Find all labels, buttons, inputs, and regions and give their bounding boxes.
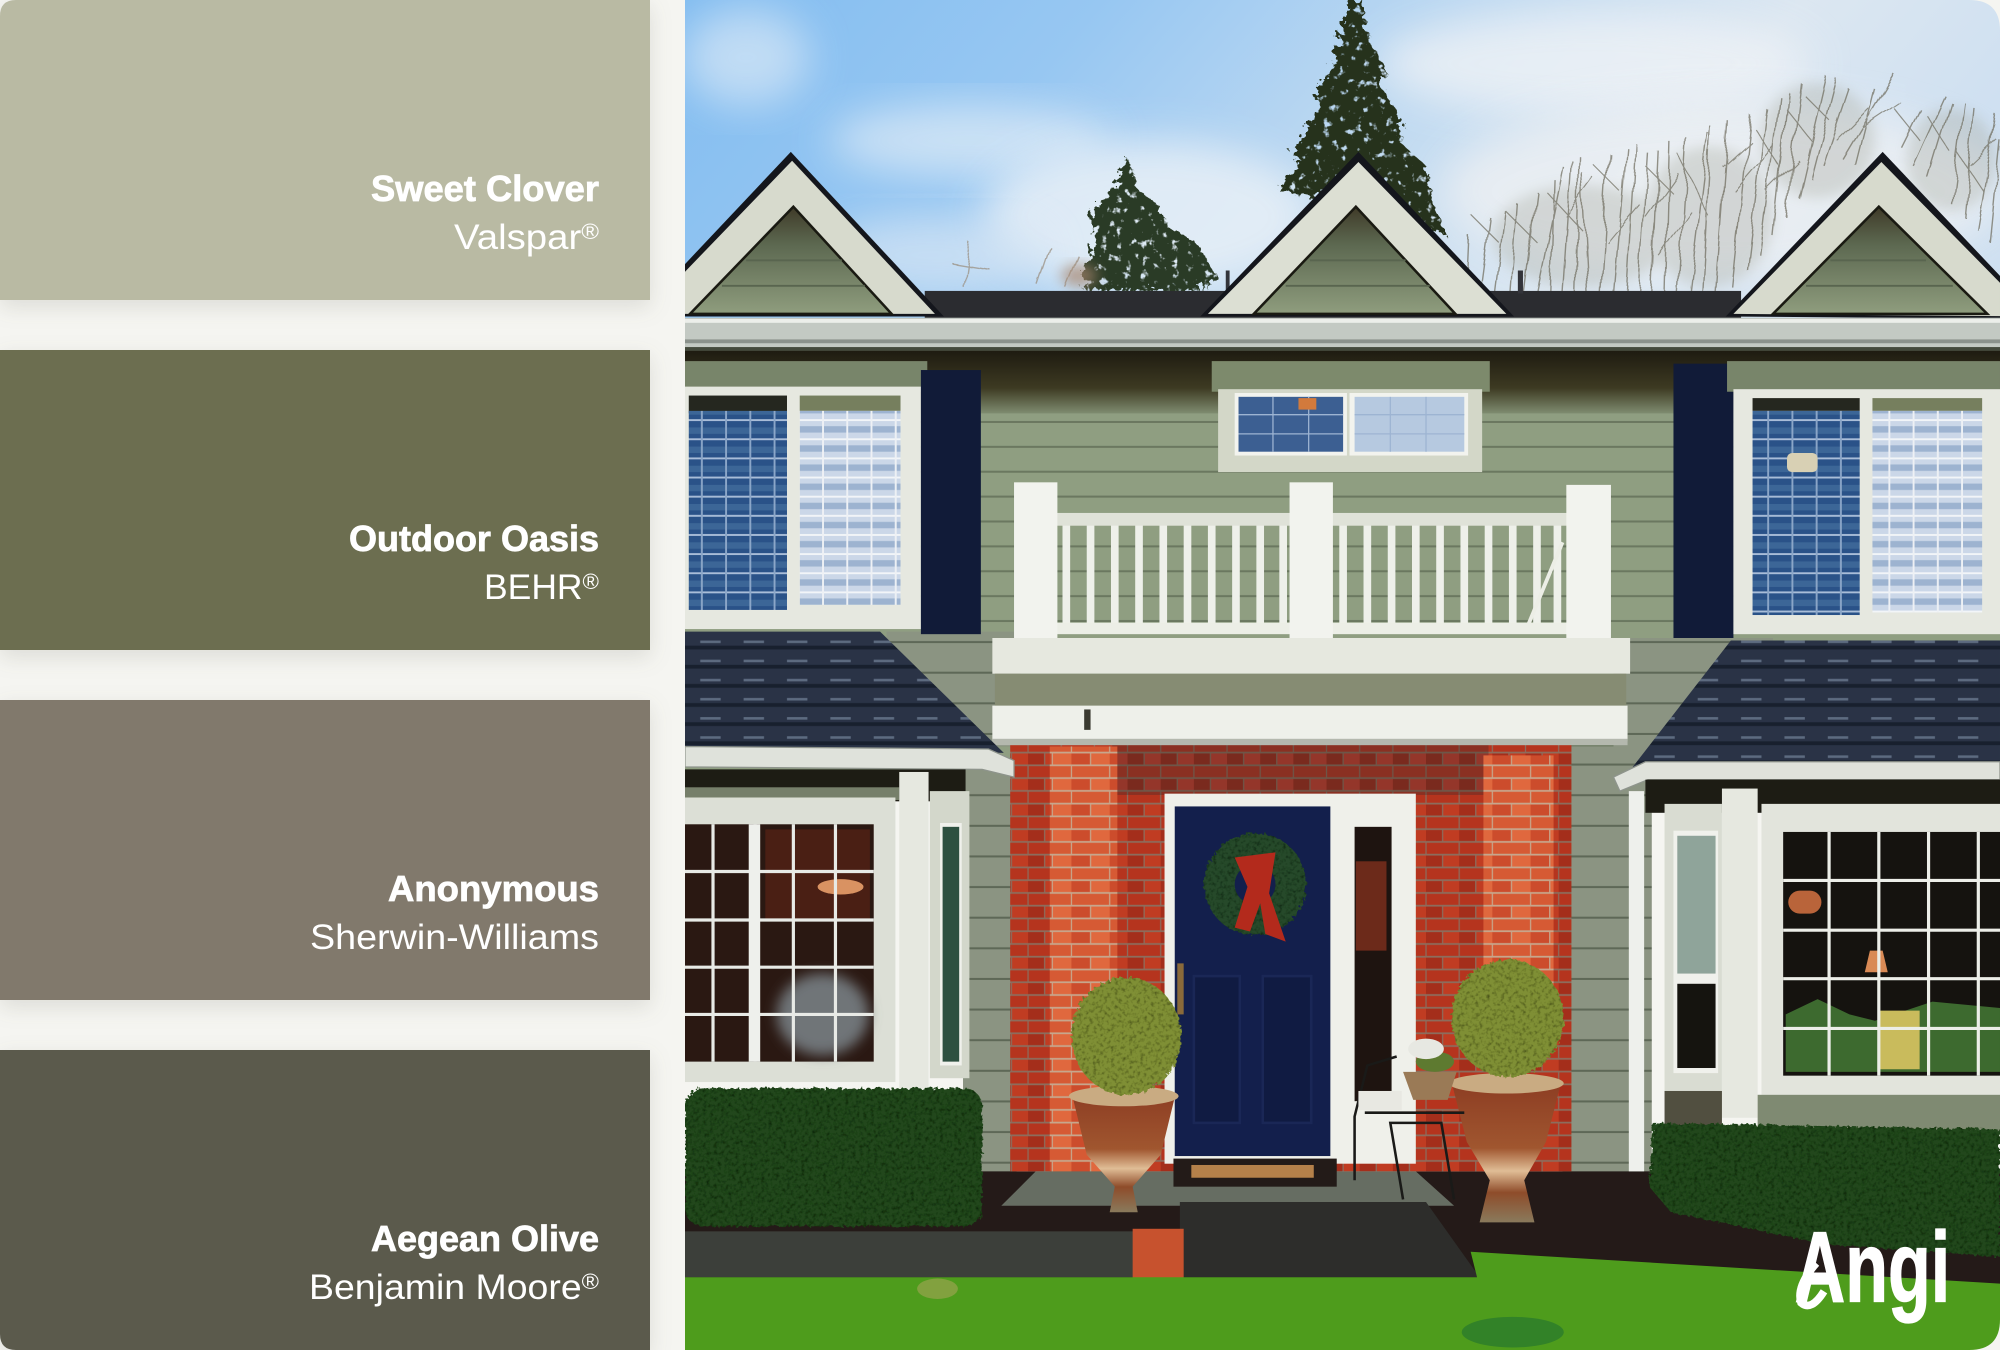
left gable <box>685 152 944 316</box>
right lower roof <box>1629 641 2000 772</box>
right hedge <box>1649 1123 2000 1257</box>
centre small window <box>1212 361 1490 472</box>
door mat <box>1173 1159 1337 1187</box>
label: Sweet Clover: Sweet Clover <box>371 168 599 209</box>
left bay window <box>685 769 969 1088</box>
sidelight <box>1355 827 1392 1101</box>
upper wall siding <box>685 413 2000 770</box>
fascia <box>685 318 2000 351</box>
porch beam <box>992 706 1628 745</box>
band below deck <box>995 674 1626 707</box>
spruce tree tall <box>1279 0 1446 235</box>
left eave <box>685 746 1014 777</box>
swatch: Aegean Olive <box>0 1050 650 1350</box>
spruce tree small <box>1084 157 1218 291</box>
right bay window <box>1645 780 2000 1133</box>
chimney vents <box>1226 271 1523 293</box>
panel: colour swatches <box>0 0 650 1350</box>
photo: green house exterior <box>682 0 2000 1350</box>
label: Benjamin Moore: ® <box>582 1269 599 1294</box>
left bay upper roof <box>685 632 1004 753</box>
orange shrub <box>1061 264 1097 287</box>
main roof <box>925 291 1741 319</box>
wreath centre <box>1234 870 1276 904</box>
brick porch <box>1010 744 1571 1193</box>
swatch: Sweet Clover <box>0 0 650 300</box>
label: BEHR: ® <box>583 569 599 594</box>
label: Valspar: Valspar <box>454 218 570 257</box>
right urn planter <box>1449 960 1564 1222</box>
label: BEHR: BEHR <box>484 568 581 607</box>
label: Valspar: ® <box>581 219 599 244</box>
walkway <box>685 1202 1480 1279</box>
front door surround <box>1165 794 1416 1164</box>
soffit shadow <box>685 350 2000 413</box>
lawn <box>685 1252 2000 1350</box>
swatch: Outdoor Oasis <box>0 350 650 650</box>
upper left window <box>685 361 927 629</box>
downspout <box>1630 791 1642 1171</box>
haze behind bare trees <box>1492 83 1996 287</box>
balcony railing <box>1014 482 1611 647</box>
porch step <box>1001 1171 1454 1206</box>
navy door <box>1175 806 1330 1156</box>
balcony deck band <box>992 638 1630 674</box>
ground base <box>685 1171 2000 1295</box>
swatch: Anonymous <box>0 700 650 1000</box>
label: Sherwin-Williams: Sherwin-Williams <box>310 918 599 957</box>
left shutter <box>921 370 981 634</box>
label: Benjamin Moore: Benjamin Moore <box>309 1268 564 1307</box>
label: Aegean Olive: Aegean Olive <box>371 1218 599 1259</box>
centre gable <box>1200 152 1514 316</box>
wreath bow <box>1235 852 1286 942</box>
bare trees <box>950 74 2000 293</box>
sky <box>685 0 2000 318</box>
porch chair and table <box>1355 1039 1464 1199</box>
label: Anonymous: Anonymous <box>388 868 599 909</box>
right eave <box>1614 762 2000 791</box>
wreath <box>1204 833 1306 935</box>
left hedge <box>685 1088 982 1226</box>
right shutter <box>1673 364 1733 638</box>
label: Outdoor Oasis: Outdoor Oasis <box>349 518 599 559</box>
left urn planter <box>1069 977 1181 1212</box>
right gable <box>1726 152 2000 319</box>
upper right window <box>1727 361 2000 634</box>
lower side walls <box>886 632 1773 1174</box>
